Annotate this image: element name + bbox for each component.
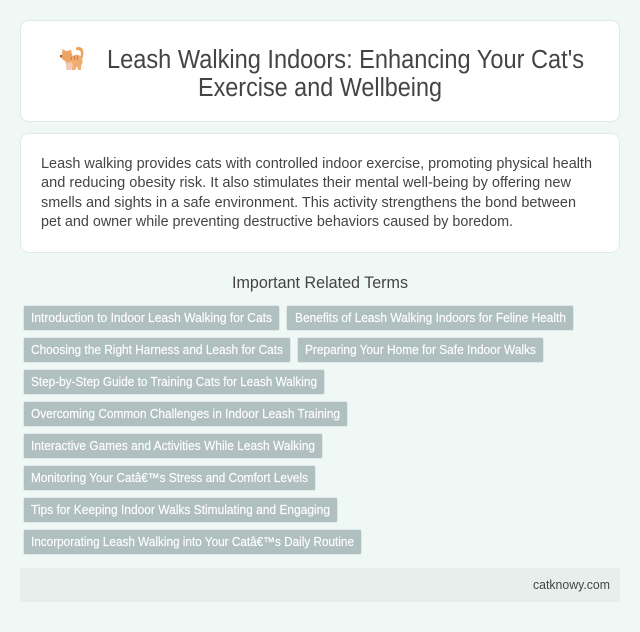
title: Leash Walking Indoors: Enhancing Your Cat's (107, 46, 584, 74)
tag: Step-by-Step Guide to Training Cats for Leash Walking (31, 375, 317, 389)
tag (24, 466, 316, 490)
tag (24, 338, 290, 362)
footer (20, 568, 620, 602)
tag: Preparing Your Home for Safe Indoor Walks (305, 343, 536, 357)
tag (24, 306, 280, 330)
title: Exercise and Wellbeing (198, 74, 442, 102)
tag (24, 402, 348, 426)
summary text: smells and sights in a safe environment. This activity strengthens the bond between (41, 194, 576, 211)
heading: important related terms: Important Related Terms (232, 274, 408, 292)
tag (24, 530, 362, 554)
tag: Interactive Games and Activities While Leash Walking (31, 439, 315, 453)
summary text: pet and owner while preventing destructive behaviors caused by boredom. (41, 213, 513, 230)
summary text: and reducing obesity risk. It also stimulates their mental well-being by offering new (41, 174, 571, 191)
summary text (41, 155, 592, 230)
tag (286, 306, 574, 330)
tag (24, 434, 322, 458)
panel: title card (20, 20, 620, 122)
tag: Tips for Keeping Indoor Walks Stimulating and Engaging (31, 503, 330, 517)
footer source text: catknowy.com (533, 577, 610, 592)
title (107, 46, 584, 102)
tag (24, 498, 338, 522)
tag: Introduction to Indoor Leash Walking for Cats (31, 311, 272, 325)
tag (298, 338, 544, 362)
tag list (24, 306, 574, 554)
tag: Monitoring Your Catâ€™s Stress and Comfort Levels (31, 471, 308, 485)
panel: summary card (20, 134, 620, 252)
tag: Benefits of Leash Walking Indoors for Feline Health (295, 311, 566, 325)
tag: Choosing the Right Harness and Leash for Cats (31, 343, 283, 357)
icon: cat (60, 47, 83, 70)
tag: Overcoming Common Challenges in Indoor Leash Training (31, 407, 340, 421)
summary text: Leash walking provides cats with controlled indoor exercise, promoting physical health (41, 155, 592, 172)
tag (24, 370, 324, 394)
tag: Incorporating Leash Walking into Your Catâ€™s Daily Routine (31, 535, 354, 549)
